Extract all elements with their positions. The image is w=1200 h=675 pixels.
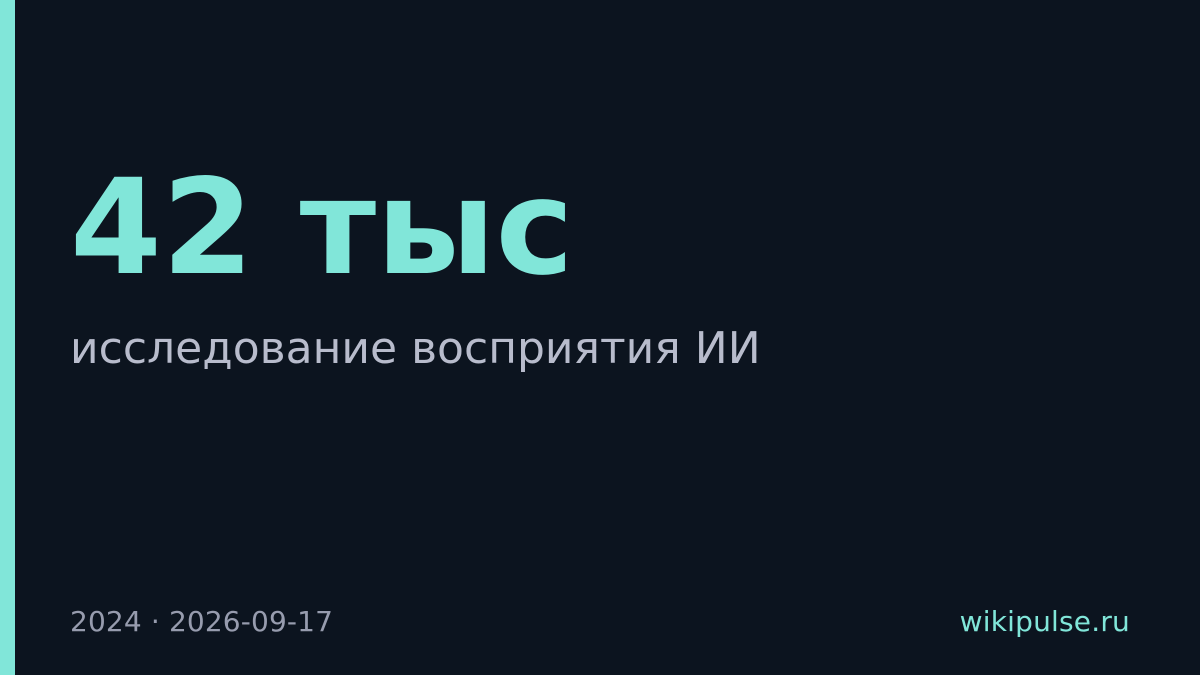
subtitle: исследование восприятия ИИ — [70, 323, 761, 374]
headline number: 42 тыс — [70, 151, 574, 305]
source site: wikipulse.ru — [960, 605, 1130, 638]
accent bar — [0, 0, 15, 675]
date line: 2024 · 2026-09-17 — [70, 605, 333, 638]
